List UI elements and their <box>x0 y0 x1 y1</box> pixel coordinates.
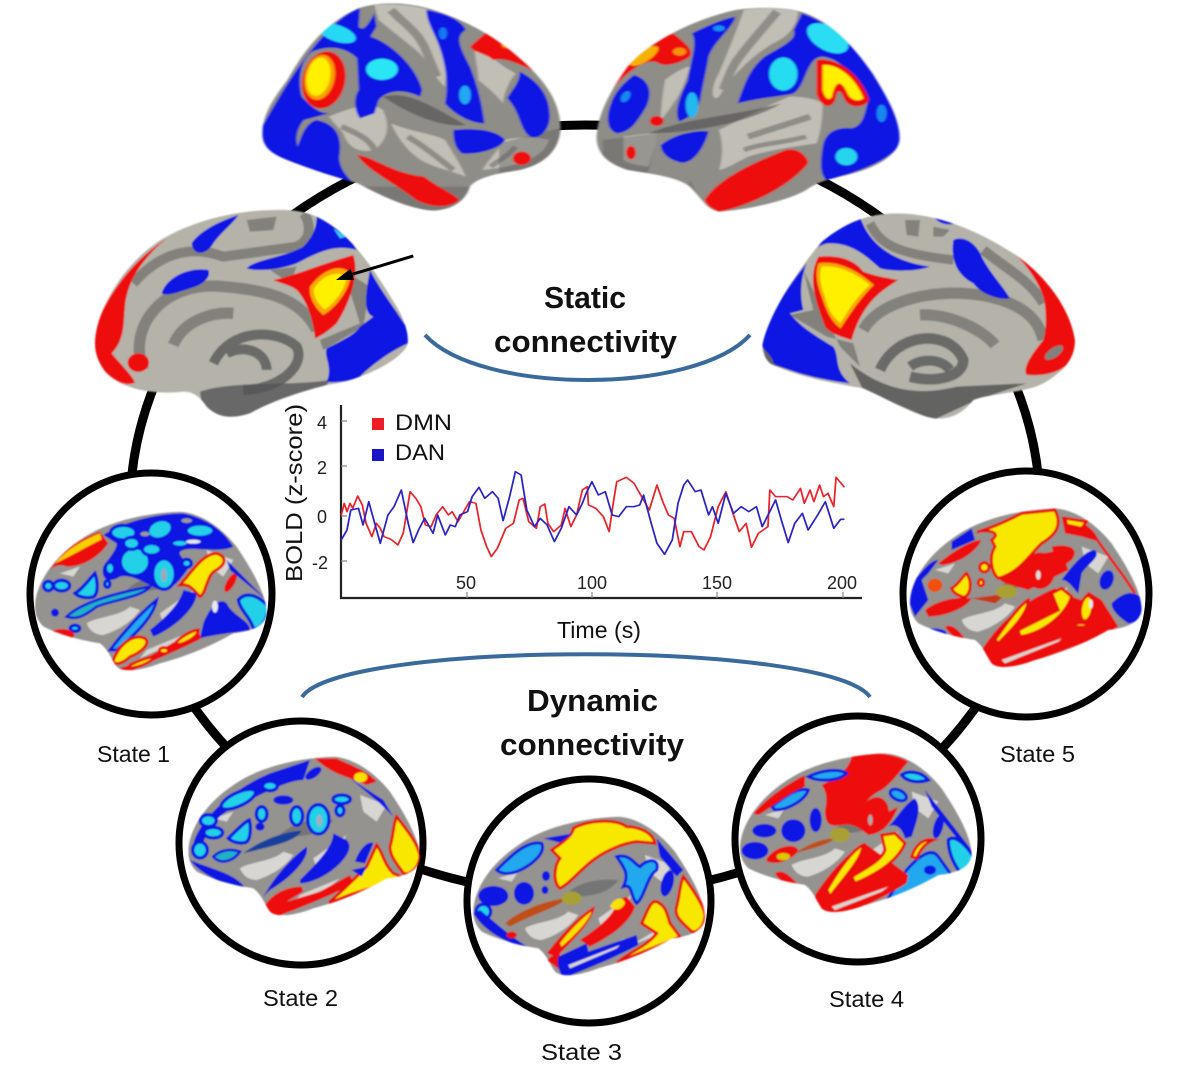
label: state 4: State 4 <box>829 986 904 1012</box>
panel: state 1 <box>30 473 272 715</box>
panel: state 5 <box>903 471 1149 717</box>
heading: dynamic connectivity <box>500 683 685 762</box>
heading: dynamic connectivity: connectivity <box>500 727 685 762</box>
panel: state 3 <box>467 779 711 1023</box>
legend <box>372 410 452 465</box>
brain: state 4 <box>740 753 975 918</box>
y tick labels: -2 <box>312 553 328 573</box>
x tick labels: 50 <box>456 573 476 593</box>
x tick labels: 200 <box>827 573 857 593</box>
connectivity ring <box>130 125 1040 895</box>
x tick labels <box>456 573 857 593</box>
DAN series <box>341 472 844 554</box>
DMN series <box>341 477 844 557</box>
brain: state 3 <box>473 817 705 978</box>
label: state 3: State 3 <box>541 1039 622 1065</box>
bracket: static connectivity arc <box>425 335 750 380</box>
heading: dynamic connectivity: Dynamic <box>527 683 658 718</box>
brain: state 2 <box>188 757 420 917</box>
label: state 1: State 1 <box>97 741 170 767</box>
panel: medial left static brain <box>94 209 414 418</box>
y tick labels: 4 <box>317 413 327 433</box>
bracket: dynamic connectivity arc <box>302 654 870 697</box>
arrow: pointing to posterior cingulate <box>336 256 413 280</box>
panel: lateral right static brain <box>595 7 902 213</box>
y tick labels <box>312 413 328 573</box>
panel: medial right static brain <box>761 212 1076 420</box>
x tick labels: 100 <box>577 573 607 593</box>
heading: static connectivity <box>494 280 678 359</box>
legend: DMN <box>395 410 452 435</box>
y tick labels: 2 <box>317 458 327 478</box>
panel: state 4 <box>735 716 981 962</box>
heading: static connectivity: connectivity <box>494 324 678 359</box>
panel: state 2 <box>179 721 423 965</box>
y axis label: BOLD (z-score) <box>281 404 307 582</box>
x tick labels: 150 <box>702 573 732 593</box>
panel: lateral left static brain <box>260 2 562 212</box>
brain: state 5 <box>905 508 1142 672</box>
chart ticks <box>341 421 843 598</box>
y tick labels: 0 <box>317 507 327 527</box>
x axis label: Time (s) <box>557 617 641 643</box>
label: state 2: State 2 <box>263 985 338 1011</box>
chart: BOLD time series <box>281 404 862 643</box>
heading: static connectivity: Static <box>544 280 626 315</box>
chart axes <box>341 405 862 598</box>
legend: DAN <box>395 440 445 465</box>
label: state 5: State 5 <box>1000 741 1075 767</box>
brain: state 1 <box>35 512 268 673</box>
